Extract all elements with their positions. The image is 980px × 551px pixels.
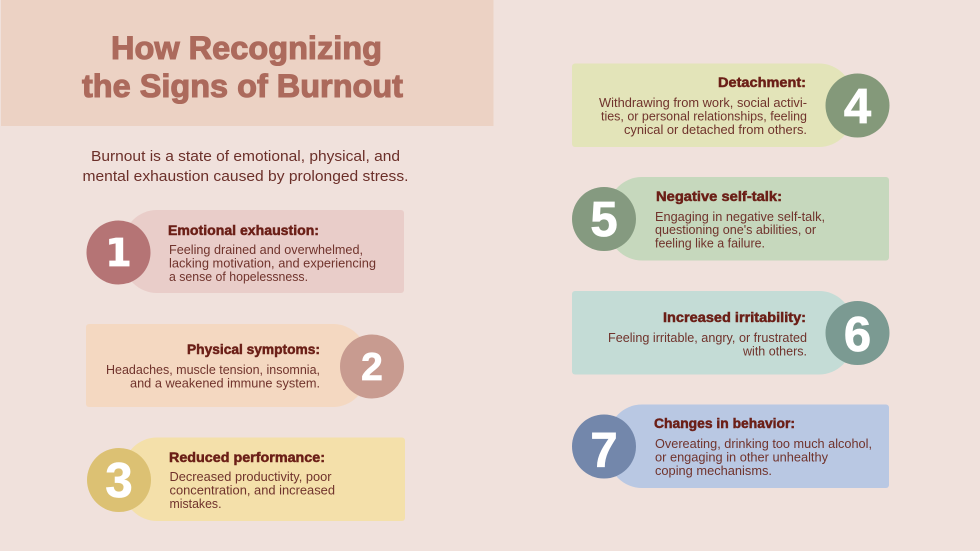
panel: 7 changes in behavior: [572, 404, 889, 488]
panel: 1 emotional exhaustion: [86, 210, 404, 293]
badge 5: [572, 187, 636, 251]
heading 3: Reduced performance:: [169, 449, 325, 465]
title: the Signs of Burnout: [82, 68, 403, 104]
body 1: Feeling drained and overwhelmed,: [169, 242, 363, 257]
badge 2: [340, 334, 404, 398]
badge 7: 7: [590, 424, 618, 478]
badge 7: [572, 414, 636, 478]
badge 3: [87, 448, 151, 512]
badge 2: 2: [361, 346, 383, 389]
body 5: feeling like a failure.: [655, 236, 765, 250]
body 3: Decreased productivity, poor: [170, 469, 332, 484]
badge 5: 5: [590, 193, 618, 247]
badge 6: [826, 301, 890, 365]
badge 1: 1: [105, 231, 132, 275]
body 4: cynical or detached from others.: [624, 122, 807, 137]
badge 4: [826, 74, 890, 138]
title: [82, 30, 403, 104]
intro text: Burnout is a state of emotional, physical, and: [91, 148, 400, 165]
heading 7: Changes in behavior:: [654, 415, 795, 431]
heading 1: Emotional exhaustion:: [168, 222, 319, 238]
body 7: Overeating, drinking too much alcohol,: [655, 436, 872, 451]
panel: 5 negative self-talk: [572, 177, 889, 260]
body 3: mistakes.: [170, 496, 222, 511]
panel: 6 increased irritability: [572, 291, 890, 374]
heading 2: Physical symptoms:: [187, 341, 320, 357]
badge 1: [86, 220, 150, 284]
badge 3: 3: [105, 454, 133, 508]
body 7: coping mechanisms.: [655, 463, 772, 478]
body 1: [169, 242, 376, 284]
body 4: [599, 95, 807, 137]
heading 4: Detachment:: [718, 74, 806, 90]
heading 5: Negative self-talk:: [656, 188, 782, 204]
intro text: mental exhaustion caused by prolonged stress.: [82, 168, 409, 185]
panel: 2 physical symptoms: [86, 324, 404, 407]
badge 4: 4: [844, 80, 871, 134]
body 7: or engaging in other unhealthy: [655, 450, 828, 464]
body 2: [106, 362, 320, 390]
body 2: Headaches, muscle tension, insomnia,: [106, 362, 320, 377]
body 1: a sense of hopelessness.: [169, 269, 308, 284]
body 4: Withdrawing from work, social activi-: [599, 95, 807, 110]
panel: 4 detachment: [572, 64, 890, 147]
body 4: ties, or personal relationships, feeling: [601, 108, 807, 124]
heading 6: Increased irritability:: [663, 309, 806, 325]
panel: 3 reduced performance: [87, 438, 405, 521]
body 6: Feeling irritable, angry, or frustrated: [608, 330, 807, 345]
body 7: [655, 436, 872, 478]
title banner: [1, 0, 494, 126]
body 6: with others.: [742, 344, 807, 358]
body 3: concentration, and increased: [170, 482, 335, 498]
body 2: and a weakened immune system.: [130, 376, 320, 390]
body 5: [655, 209, 825, 250]
body 1: lacking motivation, and experiencing: [169, 256, 376, 270]
badge 6: 6: [844, 308, 871, 362]
body 5: Engaging in negative self-talk,: [655, 209, 825, 224]
title: How Recognizing: [111, 30, 382, 66]
body 5: questioning one's abilities, or: [655, 222, 817, 237]
intro text: [82, 148, 409, 185]
body 6: [608, 330, 807, 358]
body 3: [170, 469, 335, 511]
